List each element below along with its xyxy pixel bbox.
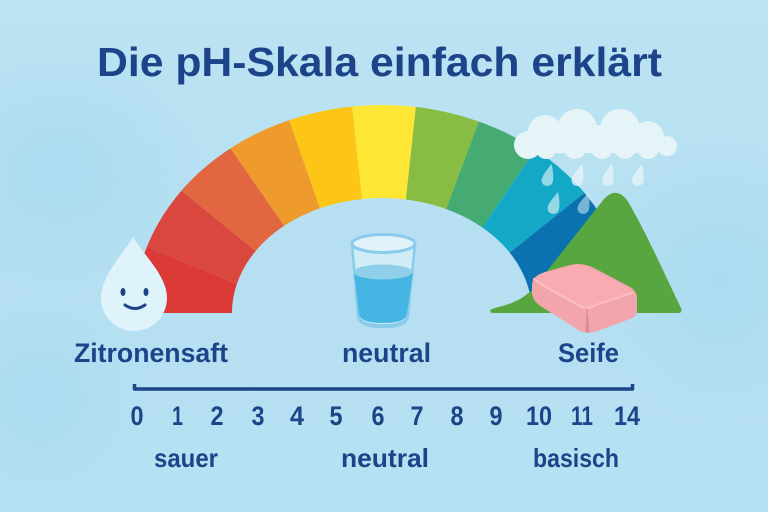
axis numbers: 5 [330, 401, 342, 431]
pH axis line [134, 384, 632, 389]
icon: soap bar [532, 264, 637, 333]
axis numbers: 3 [252, 401, 264, 431]
infographic [19, 46, 746, 468]
label: neutral: neutral [342, 338, 431, 368]
axis numbers: 9 [490, 401, 502, 431]
axis numbers: 10 [526, 401, 552, 431]
cloud [514, 109, 677, 159]
eyes [120, 288, 148, 296]
icon: mountain [490, 193, 682, 313]
label: Seife: Seife [558, 338, 619, 368]
axis numbers: 7 [410, 401, 424, 431]
axis numbers: 4 [290, 401, 304, 431]
category: basisch: basisch [533, 443, 619, 473]
rainbow pH arc [144, 105, 596, 313]
axis numbers: 2 [210, 401, 224, 431]
label: Zitronensaft: Zitronensaft [74, 338, 228, 368]
axis numbers: 8 [450, 401, 464, 431]
axis numbers: 14 [614, 401, 640, 431]
icon: smiling lemon juice drop [101, 237, 167, 331]
icon: glass of water [352, 234, 415, 327]
axis numbers [130, 401, 640, 431]
axis numbers: 6 [372, 401, 384, 431]
icon: rain cloud [514, 109, 677, 214]
raindrops [542, 164, 644, 214]
smile [125, 305, 145, 308]
category: neutral: neutral [341, 443, 429, 473]
category: sauer: sauer [154, 443, 218, 473]
title: Die pH-Skala einfach erklärt [97, 39, 662, 85]
axis numbers: 1 [172, 401, 183, 431]
axis numbers: 11 [571, 401, 593, 431]
axis numbers: 0 [130, 401, 144, 431]
